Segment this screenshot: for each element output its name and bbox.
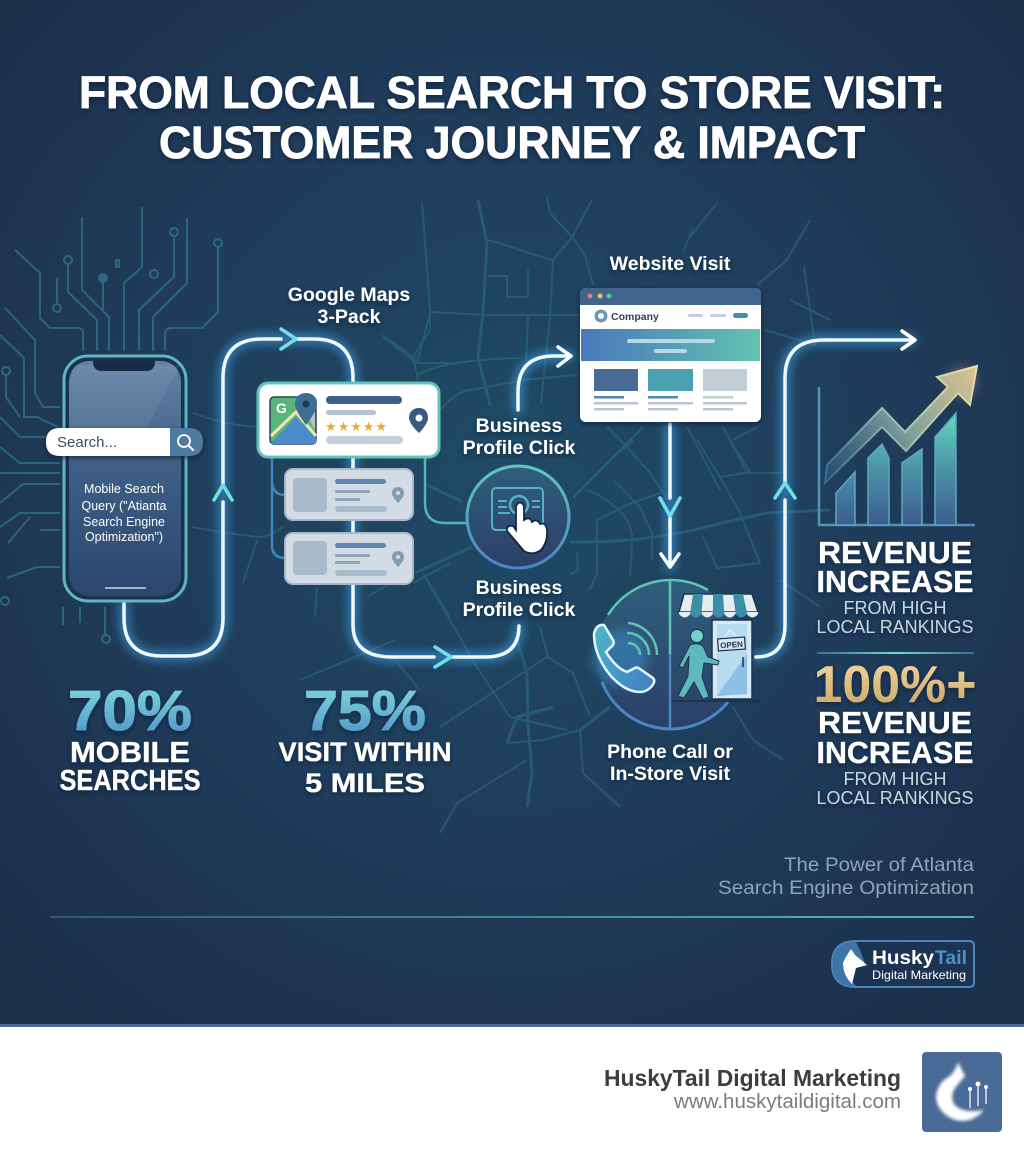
card text bars (326, 396, 402, 404)
stat: 75% visit within 5 miles: 75% (304, 679, 426, 743)
search bar (46, 428, 203, 456)
icon: footer logo (922, 1052, 1002, 1132)
phone search query text: Search Engine (83, 515, 165, 529)
background: city road map lines (192, 197, 830, 833)
label: website visit: Website Visit (610, 253, 731, 275)
label: business profile click upper: Business (476, 415, 563, 437)
label: Google Maps 3-Pack: Google Maps (288, 284, 410, 306)
footer strip (0, 1024, 1024, 1154)
stat: 70% mobile searches: 70% (68, 679, 192, 743)
chart: revenue growth (819, 366, 978, 525)
phone with search bar (46, 356, 203, 601)
phone search query text: Mobile Search (84, 482, 164, 496)
stat: 100%+ revenue increase: LOCAL RANKINGS (816, 788, 974, 808)
tagline: Search Engine Optimization (718, 878, 974, 899)
growth arrow (946, 366, 978, 398)
stat: 100%+ revenue increase: INCREASE (816, 735, 974, 770)
stat: revenue increase upper: REVENUE (818, 535, 972, 570)
background: circuit nodes (1, 228, 222, 643)
background: circuit board traces (0, 207, 218, 634)
label: Google Maps 3-Pack (288, 284, 410, 328)
stat: 70% mobile searches (60, 679, 200, 797)
stat: 100%+ revenue increase: 100%+ (814, 656, 976, 714)
tagline: The Power of Atlanta (784, 855, 974, 876)
stat: revenue increase upper (816, 535, 974, 637)
phone or store visit circle (592, 580, 760, 729)
logo badge: HuskyTail: Digital Marketing (872, 968, 966, 982)
phone search query text: Optimization") (85, 530, 163, 544)
stat: 100%+ revenue increase: REVENUE (818, 705, 972, 740)
label: Google Maps 3-Pack: 3-Pack (318, 306, 381, 328)
title: CUSTOMER JOURNEY & IMPACT (159, 117, 865, 168)
icon: business profile click circle (467, 466, 569, 568)
google maps icon (270, 393, 317, 444)
label: phone call or in-store visit: In-Store Visit (610, 763, 730, 785)
stat: 100%+ revenue increase (814, 656, 976, 808)
website browser mockup (580, 288, 761, 422)
arrowheads along flow (214, 329, 915, 667)
icon: storefront door and person (678, 594, 758, 699)
map pack main card (258, 383, 439, 457)
stat: 70% mobile searches: SEARCHES (60, 765, 200, 797)
label: phone call or in-store visit: Phone Call or (607, 741, 733, 763)
company logo and nav: Company (611, 311, 659, 323)
phone search query text (81, 482, 167, 544)
side connectors from cards (272, 457, 468, 558)
title (79, 67, 945, 168)
stat: 75% visit within 5 miles (278, 679, 452, 798)
label: business profile click upper (463, 415, 576, 459)
map pack secondary card 1 (285, 469, 413, 520)
phone search query text: Query ("Atianta (81, 499, 167, 513)
logo badge: HuskyTail: Husky (872, 948, 934, 969)
search bar: Search... (57, 434, 117, 451)
stat: revenue increase upper: LOCAL RANKINGS (816, 617, 974, 637)
label: business profile click upper: Profile Click (463, 437, 576, 459)
footer brand name: HuskyTail Digital Marketing (604, 1065, 901, 1091)
growth bars (836, 413, 956, 525)
label: business profile click lower: Business (476, 577, 563, 599)
company logo and nav (594, 310, 748, 323)
google maps icon: G (276, 400, 287, 416)
label: business profile click lower (463, 577, 576, 621)
tagline (718, 855, 974, 899)
icon: storefront door and person: OPEN (720, 640, 743, 650)
map pin (409, 408, 428, 433)
stat: 75% visit within 5 miles: VISIT WITHIN (278, 737, 452, 767)
journey flow path with glow (124, 339, 912, 657)
map pack secondary card 2 (285, 533, 413, 584)
stat: 100%+ revenue increase: FROM HIGH (844, 769, 946, 789)
stat: 70% mobile searches: MOBILE (70, 737, 190, 769)
phone home bar (105, 587, 146, 589)
stat: revenue increase upper: INCREASE (816, 564, 974, 599)
logo badge: HuskyTail: Tail (935, 948, 967, 969)
content columns (594, 369, 638, 391)
footer url: www.huskytaildigital.com (673, 1091, 901, 1113)
label: business profile click lower: Profile Click (463, 599, 576, 621)
stat: 75% visit within 5 miles: 5 MILES (305, 768, 425, 798)
star rating: ★★★★★ (325, 420, 387, 435)
logo badge: HuskyTail (832, 941, 974, 987)
icon: phone handset (592, 623, 657, 692)
stat: revenue increase upper: FROM HIGH (844, 598, 946, 618)
hero banner (581, 329, 760, 361)
label: phone call or in-store visit (607, 741, 733, 785)
title: FROM LOCAL SEARCH TO STORE VISIT: (79, 67, 945, 118)
phone notch (93, 361, 155, 371)
